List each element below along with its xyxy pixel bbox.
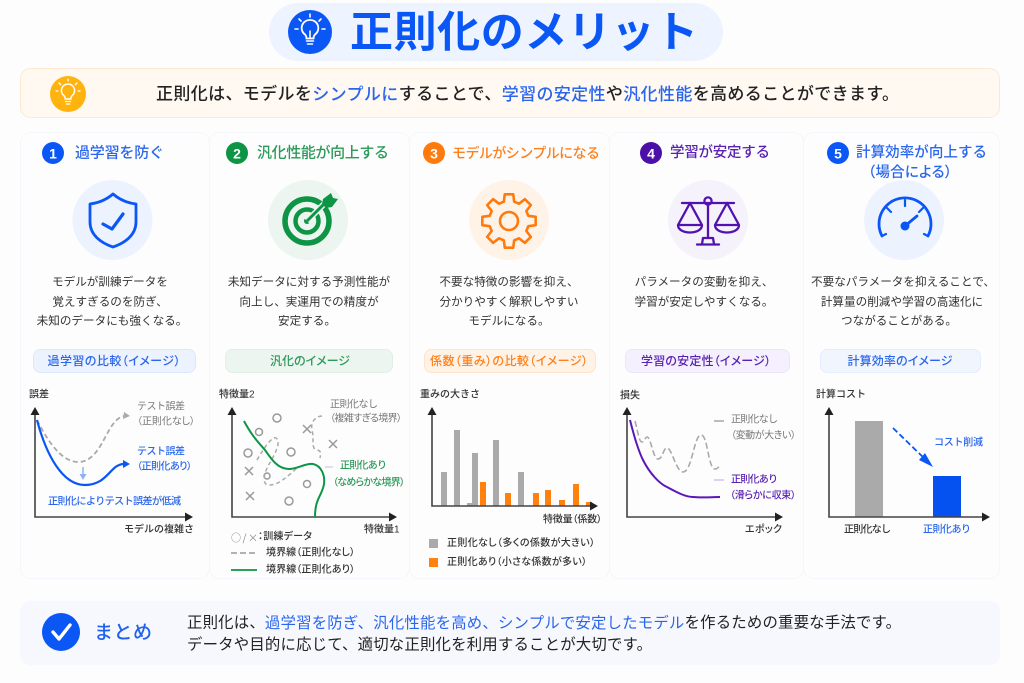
heading 4 — [640, 142, 770, 164]
label 3: 係数（重み）の比較（イメージ） — [430, 353, 588, 368]
description 3: モデルになる。 — [468, 314, 550, 328]
heading 2: 2 — [233, 146, 241, 162]
description 1: モデルが訓練データを — [52, 274, 168, 288]
heading 5: 5 — [834, 146, 842, 162]
chart: compute cost bars: 正則化なし — [844, 522, 891, 536]
panel: 2 generalization — [210, 132, 410, 578]
chart: compute cost bars: コスト削減 — [934, 436, 983, 448]
description 4: 学習が安定しやすくなる。 — [634, 294, 774, 308]
chart: decision boundary: （複雑すぎる境界） — [330, 412, 402, 424]
chart: decision boundary: （なめらかな境界） — [333, 476, 405, 488]
icon: target — [268, 180, 348, 260]
heading 4: 4 — [647, 146, 655, 162]
chart: test error comparison — [29, 388, 195, 536]
summary heading: まとめ — [94, 622, 152, 644]
label 3 — [424, 350, 596, 372]
chart: loss curves — [620, 388, 796, 536]
summary text: 正則化は、過学習を防ぎ、汎化性能を高め、シンプルで安定したモデルを作るための重要な手法です。 — [187, 612, 901, 632]
chart legend: 境界線（正則化なし） — [266, 546, 355, 558]
chart: loss curves: （滑らかに収束） — [730, 488, 796, 502]
chart: coefficient bars — [420, 388, 602, 568]
chart: coefficient bars: 特徴量（係数） — [543, 512, 602, 526]
chart: decision boundary: 特徴量1 — [364, 522, 400, 536]
title — [269, 3, 723, 61]
chart: test error comparison: （正則化あり） — [137, 460, 192, 472]
chart: decision boundary: 特徴量2 — [219, 388, 255, 400]
label 2: 汎化のイメージ — [270, 354, 350, 368]
icon: shield — [72, 180, 152, 260]
description 2 — [228, 274, 391, 328]
heading 3: モデルがシンプルになる — [452, 145, 600, 161]
label 4 — [626, 350, 790, 372]
chart: test error comparison: テスト誤差 — [137, 400, 185, 412]
icon: check — [42, 613, 80, 651]
panel: 1 overfitting prevention — [20, 132, 210, 578]
chart legend: 境界線（正則化あり） — [266, 562, 355, 576]
description 2: 向上し、実運用での精度が — [239, 294, 379, 308]
chart: test error comparison: モデルの複雑さ — [124, 522, 194, 536]
chart: test error comparison: （正則化なし） — [137, 416, 195, 428]
chart legend: ：訓練データ — [258, 530, 312, 542]
chart: loss curves: エポック — [745, 524, 782, 536]
intro text: 正則化は、モデルをシンプルにすることで、学習の安定性や汎化性能を高めることができます。 — [156, 84, 899, 104]
chart: coefficient bars: 重みの大きさ — [420, 388, 480, 400]
chart: loss curves: 正則化なし — [731, 414, 778, 426]
chart: loss curves: 損失 — [620, 388, 640, 402]
heading 1: 過学習を防ぐ — [75, 144, 164, 162]
chart legend — [231, 530, 355, 576]
chart: compute cost bars: 正則化あり — [923, 522, 971, 536]
description 5: つながることがある。 — [841, 314, 957, 328]
title text: 正則化のメリット — [350, 9, 698, 57]
label 4: 学習の安定性（イメージ） — [641, 353, 771, 368]
chart: test error comparison: 正則化によりテスト誤差が低減 — [48, 494, 181, 508]
description 4 — [634, 274, 774, 308]
icon: amber light bulb — [50, 76, 86, 112]
description 5: 不要なパラメータを抑えることで、 — [811, 274, 995, 288]
description 1: 覚えすぎるのを防ぎ、 — [52, 294, 168, 308]
chart legend: 正則化あり（小さな係数が多い） — [447, 555, 587, 568]
label 1: 過学習の比較（イメージ） — [48, 353, 180, 368]
chart: decision boundary: 正則化なし — [330, 398, 378, 410]
heading 3: 3 — [430, 146, 438, 162]
chart: test error comparison: テスト誤差 — [137, 444, 185, 458]
label 1 — [34, 350, 196, 372]
chart: test error comparison: 誤差 — [29, 388, 49, 400]
heading 4: 学習が安定する — [670, 143, 770, 161]
icon: gear — [469, 180, 549, 260]
icon: balance scale — [668, 180, 748, 260]
description 1 — [37, 274, 187, 328]
description 2: 安定する。 — [278, 314, 336, 328]
heading 2: 汎化性能が向上する — [257, 144, 389, 162]
label 5 — [820, 350, 980, 372]
chart legend — [429, 536, 595, 568]
chart: compute cost bars — [816, 388, 990, 536]
summary text — [187, 612, 901, 654]
chart: loss curves: 正則化あり — [731, 472, 778, 486]
description 4: パラメータの変動を抑え、 — [635, 274, 773, 288]
heading 1 — [42, 142, 164, 164]
icon: title light bulb — [288, 10, 332, 54]
panel: 4 stable training — [610, 132, 804, 578]
heading 5: （場合による） — [868, 164, 952, 181]
label 5: 計算効率のイメージ — [848, 353, 953, 368]
chart legend: ○/× — [231, 530, 258, 544]
chart: compute cost bars: 計算コスト — [816, 388, 866, 400]
panel: 3 simple model — [410, 132, 610, 578]
chart: decision boundary — [219, 388, 405, 576]
summary text: データや目的に応じて、適切な正則化を利用することが大切です。 — [187, 634, 652, 654]
intro banner — [20, 68, 1000, 118]
description 3 — [439, 274, 579, 328]
heading 3 — [423, 142, 600, 164]
chart: loss curves: （変動が大きい） — [731, 428, 796, 442]
heading 5: 計算効率が向上する — [856, 143, 987, 161]
description 3: 分かりやすく解釈しやすい — [439, 294, 579, 308]
summary panel — [20, 601, 1000, 665]
description 1: 未知のデータにも強くなる。 — [37, 314, 187, 328]
description 5: 計算量の削減や学習の高速化に — [821, 294, 983, 308]
panel: 5 compute efficiency — [804, 132, 1000, 578]
icon: speedometer — [864, 180, 944, 260]
chart: decision boundary: 正則化あり — [340, 458, 387, 472]
description 3: 不要な特徴の影響を抑え、 — [439, 274, 579, 288]
label 2 — [226, 350, 392, 372]
description 2: 未知データに対する予測性能が — [228, 274, 391, 288]
heading 1: 1 — [49, 146, 57, 162]
heading 5 — [827, 142, 987, 181]
chart legend: 正則化なし（多くの係数が大きい） — [447, 536, 595, 549]
heading 2 — [226, 142, 389, 164]
description 5 — [811, 274, 995, 328]
